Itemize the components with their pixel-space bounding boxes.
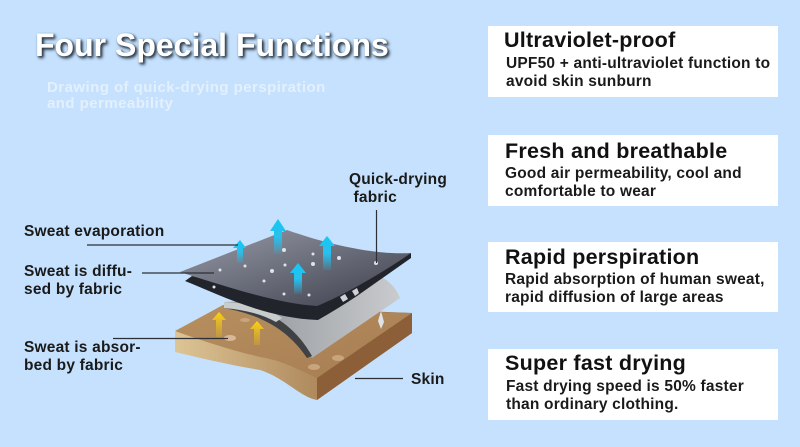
text: super fast drying description: Fast drying speed is 50% faster bbox=[506, 378, 744, 395]
panel: fresh and breathable bbox=[488, 135, 778, 206]
label: sweat is diffused by fabric: sed by fabric bbox=[24, 281, 122, 298]
label: quick-drying fabric: Quick-drying bbox=[349, 171, 447, 188]
label: sweat is absorbed by fabric: bed by fabric bbox=[24, 357, 123, 374]
skin block bbox=[175, 305, 412, 400]
heading: ultraviolet-proof: Ultraviolet-proof bbox=[504, 28, 675, 52]
quick-drying fabric layer bbox=[180, 230, 411, 320]
panel: rapid perspiration bbox=[488, 242, 778, 312]
panel: ultraviolet-proof bbox=[488, 26, 778, 97]
text: fresh and breathable description: comfortable to wear bbox=[505, 183, 656, 200]
subtitle bbox=[47, 79, 326, 112]
label: quick-drying fabric: fabric bbox=[354, 189, 397, 206]
subtitle: and permeability bbox=[47, 95, 173, 112]
text: super fast drying description bbox=[506, 378, 744, 413]
text: ultraviolet-proof description bbox=[506, 55, 770, 90]
icon: yellow arrows bbox=[212, 312, 264, 345]
subtitle: Drawing of quick-drying perspiration bbox=[47, 79, 326, 96]
heading: rapid perspiration: Rapid perspiration bbox=[505, 245, 699, 269]
text: ultraviolet-proof description: UPF50 + anti-ultraviolet function to bbox=[506, 55, 770, 72]
label: sweat is diffused by fabric: Sweat is diffu- bbox=[24, 263, 132, 280]
label: skin: Skin bbox=[411, 371, 445, 388]
text: fresh and breathable description: Good air permeability, cool and bbox=[505, 165, 742, 182]
label: sweat is absorbed by fabric bbox=[24, 339, 141, 374]
title: Four Special Functions bbox=[35, 27, 389, 63]
text: super fast drying description: than ordinary clothing. bbox=[506, 396, 679, 413]
leader lines bbox=[87, 210, 403, 378]
label: sweat is diffused by fabric bbox=[24, 263, 132, 298]
label: sweat is absorbed by fabric: Sweat is absor- bbox=[24, 339, 141, 356]
text: rapid perspiration description: rapid diffusion of large areas bbox=[505, 289, 724, 306]
text: ultraviolet-proof description: avoid skin sunburn bbox=[506, 73, 652, 90]
text: rapid perspiration description bbox=[505, 271, 765, 306]
heading: super fast drying: Super fast drying bbox=[505, 351, 686, 375]
panel: super fast drying bbox=[488, 349, 778, 420]
text: rapid perspiration description: Rapid absorption of human sweat, bbox=[505, 271, 765, 288]
label: quick-drying fabric bbox=[349, 171, 447, 206]
icon: cyan arrows bbox=[233, 219, 335, 294]
label: sweat evaporation: Sweat evaporation bbox=[24, 223, 164, 240]
middle fabric layer bbox=[224, 276, 400, 358]
text: fresh and breathable description bbox=[505, 165, 742, 200]
heading: fresh and breathable: Fresh and breathable bbox=[505, 139, 727, 163]
